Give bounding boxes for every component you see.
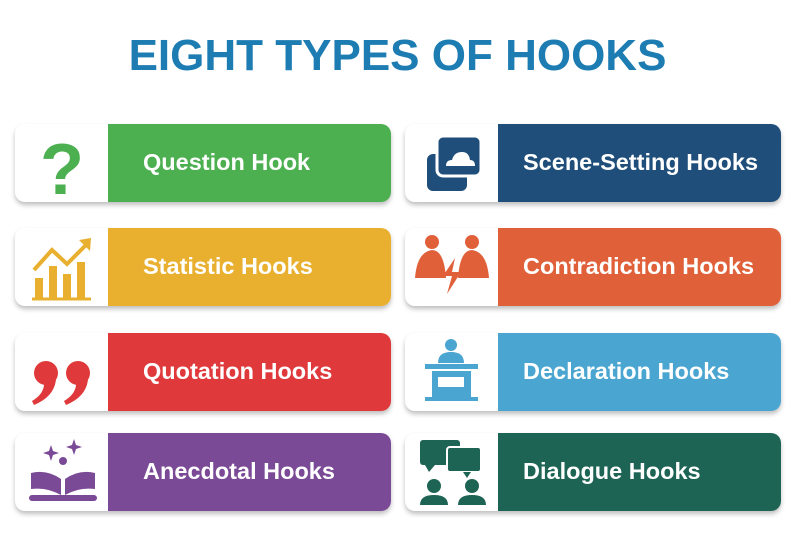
label (108, 228, 391, 306)
label: Anecdotal Hooks (143, 458, 335, 484)
icon: podium (425, 339, 478, 401)
label: Dialogue Hooks (523, 458, 701, 484)
icon: images (427, 138, 480, 191)
title: EIGHT TYPES OF HOOKS (129, 31, 666, 80)
label: Statistic Hooks (143, 253, 313, 279)
label (108, 124, 391, 202)
card: dialogue hooks (405, 433, 781, 511)
icon: chart (32, 238, 91, 300)
label (108, 433, 391, 511)
card: quotation hooks (15, 333, 391, 411)
label: Contradiction Hooks (523, 253, 754, 279)
label: Declaration Hooks (523, 358, 729, 384)
label: Quotation Hooks (143, 358, 332, 384)
label (498, 124, 781, 202)
label: Question Hook (143, 149, 310, 175)
card: statistic hooks (15, 228, 391, 306)
label: Scene-Setting Hooks (523, 149, 758, 175)
label (108, 333, 391, 411)
label (498, 333, 781, 411)
card: declaration hooks (405, 333, 781, 411)
card: scene-setting hooks (405, 124, 781, 202)
icon: arguing people (415, 235, 489, 294)
label (498, 228, 781, 306)
icon: book (29, 439, 97, 501)
card: contradiction hooks (405, 228, 781, 306)
icon: speech bubbles (420, 440, 486, 505)
label (498, 433, 781, 511)
icon: quote (32, 361, 90, 405)
card: anecdotal hooks (15, 433, 391, 511)
card: question hook (15, 124, 391, 202)
